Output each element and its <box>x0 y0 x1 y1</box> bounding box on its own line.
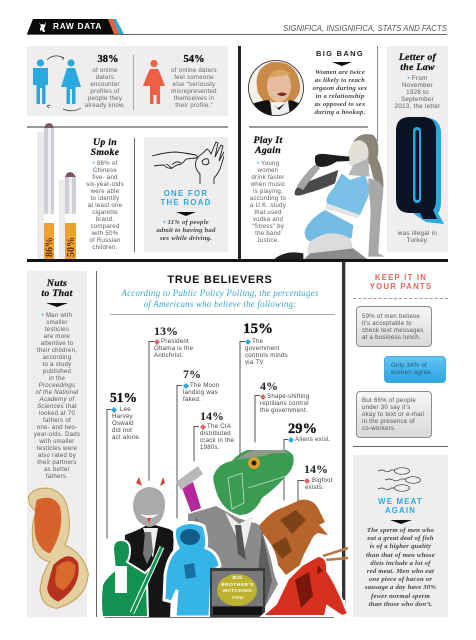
bubble 2 <box>384 356 446 383</box>
stat 38%: already know. <box>85 102 125 109</box>
image: peanut <box>28 488 89 609</box>
heading <box>398 52 437 73</box>
heading: WE MEAT <box>378 497 423 506</box>
text: orgasm during sex <box>313 85 367 92</box>
bubble 1: 59% of men believe <box>362 313 420 320</box>
stat 38%: of online <box>92 67 118 74</box>
text: as opposed to sex <box>315 101 365 108</box>
text: 1928 to <box>406 89 429 96</box>
stat: 4%: reptilians control <box>260 400 309 407</box>
text: up in smoke: children. <box>92 244 118 251</box>
icon: hands <box>152 141 224 184</box>
panel: online daters <box>27 46 228 116</box>
big letter Q <box>396 117 444 224</box>
stat: 14% bigfoot <box>304 462 333 491</box>
text: one- and two- <box>37 424 77 431</box>
tv caption: BROTHER'S <box>221 582 254 588</box>
text: up in smoke: brand, <box>96 216 114 223</box>
text: up in smoke: of Russian <box>89 237 121 244</box>
text <box>156 219 216 242</box>
heading: ONE FOR <box>164 189 208 198</box>
text: up in smoke: to identify <box>91 195 119 202</box>
text <box>394 75 440 110</box>
stat 54%: misrepresented <box>171 88 217 95</box>
heading <box>378 497 423 515</box>
stat: 14% CIA: crack in the <box>200 437 234 444</box>
bigfoot <box>323 548 348 560</box>
heading: play it again: Again <box>255 145 281 156</box>
heading: AGAIN <box>385 506 416 515</box>
stat: 51% <box>110 390 141 441</box>
stat 38%: people they <box>88 95 122 102</box>
bubble 3: under 30 say it’s <box>362 404 411 411</box>
stat: 7%: faked. <box>183 396 201 403</box>
text: up in smoke: Chinese <box>93 167 117 174</box>
bubble 3: But 66% of people <box>362 397 416 404</box>
icon: sperm <box>378 467 421 492</box>
photo: woman drinking <box>275 134 385 259</box>
heading: BIG BANG <box>316 49 364 58</box>
text: play it again: when music <box>251 181 285 188</box>
stat 54%: 54% <box>184 54 204 65</box>
tv caption <box>221 576 254 600</box>
bubble 1 <box>356 306 432 347</box>
text: published <box>43 368 71 375</box>
text: year-olds. Dads <box>34 431 80 438</box>
text: • From <box>407 75 428 82</box>
text: eat a great deal of fish <box>367 535 434 542</box>
stat 54% <box>171 54 217 109</box>
stat: 15%: 15% <box>243 321 273 337</box>
text: was illegal in <box>398 230 437 237</box>
bubble 3: in the presence of <box>362 418 415 425</box>
subheading <box>120 288 319 309</box>
heading: up in smoke: Smoke <box>91 147 119 158</box>
stat: 15%: controls minds <box>245 352 288 359</box>
text <box>312 69 367 116</box>
text: play it again: is playing, <box>253 188 283 195</box>
text: play it again <box>250 160 286 244</box>
panel: up in smoke cigarettes <box>37 123 77 259</box>
bubble 1: it’s acceptable to <box>362 320 412 327</box>
stat: 4%: 4% <box>260 379 278 393</box>
lightsaber <box>182 482 201 512</box>
stat: 15%: via TV. <box>245 359 265 366</box>
stat 38%: 38% <box>98 54 118 65</box>
stat: 51%: Oswald <box>112 420 134 427</box>
obama suit <box>122 525 174 617</box>
heading: Letter of <box>399 52 436 63</box>
stat: 7%: landing was <box>183 389 218 396</box>
icon: man and woman <box>33 56 82 112</box>
text: up in smoke: at least one <box>88 202 122 209</box>
text <box>398 230 437 244</box>
stat: 51%: Lee <box>120 406 131 413</box>
subheading: of Americans who believe the following: <box>144 298 296 308</box>
stat 54%: feel someone <box>174 74 214 81</box>
text: play it again: the band <box>255 230 281 237</box>
text: fathers of <box>43 417 71 424</box>
heading <box>370 273 432 291</box>
triangle <box>390 520 412 524</box>
text: according <box>43 354 71 361</box>
header: tagline: SIGNIFICA, INSIGNIFICA, STATS AND FACTS <box>283 24 447 33</box>
text: Proceedings <box>39 382 75 389</box>
stat: 14% CIA <box>200 409 234 451</box>
icon: overweight figure <box>143 60 165 104</box>
text: than those who don’t. <box>369 601 432 608</box>
text: as better <box>44 466 70 473</box>
text: in the <box>49 375 65 382</box>
text: sex while driving. <box>160 235 212 242</box>
rule <box>353 446 448 447</box>
heading: KEEP IT IN <box>375 273 427 282</box>
astronaut <box>164 522 220 617</box>
text: up in smoke: compared <box>90 223 120 230</box>
text: fathers. <box>46 473 68 480</box>
stat: 7% <box>183 367 219 403</box>
text: attentive to <box>41 340 73 347</box>
heading: play it again: Play It <box>253 135 283 146</box>
stat 38%: daters <box>96 74 114 81</box>
stat: 14% CIA: 1980s. <box>200 444 220 451</box>
stat: 13%: President <box>161 338 189 345</box>
text: up in smoke: cigarette <box>92 209 118 216</box>
text: looked at 70 <box>39 410 75 417</box>
stat: 14% bigfoot: exists. <box>305 484 324 491</box>
stat: 15% <box>243 321 288 366</box>
panel: keep it in your pants <box>353 273 448 447</box>
text: play it again: “Stress” by <box>252 223 284 230</box>
photo: woman portrait <box>248 60 304 116</box>
stat 54%: themselves in <box>174 95 214 102</box>
bubble 2: women agree. <box>391 369 433 376</box>
text: 2013, the letter <box>394 103 440 110</box>
stat 54%: of online daters <box>171 67 217 74</box>
tv caption: YOU <box>232 596 243 600</box>
collage baseline <box>105 617 334 618</box>
stat: 4%: the government. <box>260 407 308 414</box>
text: • 11% of people <box>163 219 209 226</box>
panel: letter of the law <box>387 46 448 252</box>
heading: THE ROAD <box>160 198 212 207</box>
heading: up in smoke: Up in <box>93 137 117 148</box>
text <box>34 312 80 480</box>
heading: TRUE BELIEVERS <box>167 274 273 286</box>
text: testicles <box>45 326 69 333</box>
text: Academy of <box>40 396 74 403</box>
stat: 51%: act alone. <box>112 434 141 441</box>
stat: 15%: The <box>252 338 263 345</box>
bubble 3 <box>356 391 432 438</box>
text: admit to having had <box>156 227 215 234</box>
TV <box>210 568 265 617</box>
text: than that of men whose <box>366 552 435 559</box>
stat: 13% <box>154 324 193 359</box>
suit <box>188 506 278 616</box>
text: Sciences that <box>37 403 77 410</box>
heading: to That <box>41 288 73 299</box>
stat: 14% bigfoot: Bigfoot <box>312 477 333 484</box>
stat: 29%: Aliens exist. <box>295 436 331 443</box>
stat: 51%: Harvey <box>112 413 133 420</box>
stat: 14% CIA: The CIA <box>207 423 231 430</box>
triangle <box>176 212 196 216</box>
heading <box>160 189 212 207</box>
stat 38% <box>85 54 125 109</box>
bubble 1: check text messages <box>362 327 424 334</box>
panel: big bang <box>248 49 367 116</box>
text: fewer normal sperm <box>371 593 430 600</box>
text: up in smoke: were able <box>91 188 119 195</box>
text: diets include a lot of <box>370 560 431 567</box>
text: play it again: • Young <box>257 160 279 167</box>
text: their children, <box>37 347 77 354</box>
header: rule <box>27 34 447 35</box>
text: September <box>401 96 434 103</box>
header: raw data tab: RAW DATA <box>53 21 102 31</box>
text <box>364 527 436 608</box>
stat: 51%: 51% <box>110 390 137 405</box>
stat: 29% <box>288 421 331 443</box>
stat 38%: encounter <box>90 81 120 88</box>
column rule right <box>342 262 345 600</box>
text: play it again: that used <box>254 209 282 216</box>
text: November <box>402 82 433 89</box>
text: their partners <box>37 459 77 466</box>
dashed rule <box>353 298 448 299</box>
stat: 4% <box>260 379 309 414</box>
stat: 4%: Shape-shifting <box>267 393 309 400</box>
text: as likely to reach <box>315 77 365 84</box>
bubble 1: at a business lunch. <box>362 334 421 341</box>
text: play it again: drink faster <box>251 174 285 181</box>
bubble 3: co-workers. <box>362 425 396 432</box>
stat 54%: else “seriously <box>173 81 215 88</box>
triangle <box>46 303 68 307</box>
heading <box>41 278 73 299</box>
text: play it again: vodka and <box>253 216 283 223</box>
text: play it again: a U.K. study <box>250 202 286 209</box>
text: sausage a day have 30% <box>365 584 436 591</box>
heading: play it again <box>253 135 283 156</box>
text: of the National <box>35 389 79 396</box>
text: to a study <box>43 361 71 368</box>
text: up in smoke: five- and <box>92 174 118 181</box>
text: during a hookup. <box>315 109 365 116</box>
text: play it again: according to <box>250 195 286 202</box>
stat 38%: profiles of <box>90 88 120 95</box>
stat: 13%: 13% <box>154 324 178 338</box>
tv caption: WATCHING <box>223 589 252 594</box>
heading: the Law <box>400 62 435 73</box>
text: in a relationship <box>316 93 364 100</box>
alien <box>257 500 328 575</box>
text: up in smoke: with 50% <box>92 230 118 237</box>
heading: up in smoke <box>90 137 119 158</box>
text: play it again: women <box>258 167 278 174</box>
tv caption: BIG <box>232 576 243 581</box>
text: • Men with <box>42 312 72 319</box>
triangle <box>332 62 352 66</box>
header: raw data tab <box>27 19 124 34</box>
lizard <box>213 447 294 515</box>
panel: we meat again <box>353 455 448 617</box>
panel: one for the road <box>144 137 228 252</box>
text: Women are twice <box>315 69 365 76</box>
stat: 14% bigfoot: 14% <box>304 462 328 476</box>
heading: YOUR PANTS <box>370 282 432 291</box>
panel: true believers <box>120 274 319 309</box>
stat: 14% CIA: distributed <box>200 430 231 437</box>
bubble 2: Only 34% of <box>391 362 427 369</box>
stat: 29%: 29% <box>288 421 317 437</box>
text: are more <box>44 333 70 340</box>
text: red meat. Men who eat <box>367 568 434 575</box>
text: up in smoke <box>86 160 124 251</box>
thick section rule <box>27 259 448 262</box>
text: smaller <box>46 319 68 326</box>
text: play it again: Justice. <box>257 237 279 244</box>
heading: Nuts <box>47 278 67 289</box>
text: Turkey. <box>406 237 429 244</box>
text: testicles were <box>37 445 77 452</box>
text: The sperm of men who <box>367 527 434 534</box>
text: with smaller <box>39 438 75 445</box>
bubble 3: okay to text or e-mail <box>362 411 424 418</box>
text: is of a higher quality <box>370 543 431 550</box>
text: one piece of bacon or <box>369 576 432 583</box>
stat: 13%: Antichrist. <box>154 352 184 359</box>
panel: nuts to that <box>27 271 87 617</box>
text: up in smoke: six-year-olds <box>86 181 124 188</box>
text: also rated by <box>38 452 76 459</box>
oswald <box>101 540 150 617</box>
stat: 14% CIA: 14% <box>200 409 224 423</box>
stat: 7%: The Moon <box>190 382 219 389</box>
obama head <box>133 487 165 527</box>
stat: 7%: 7% <box>183 367 201 381</box>
stat 54%: their profile.” <box>175 102 213 109</box>
subheading: According to Public Policy Polling, the percentages <box>121 288 319 298</box>
thick black column rule <box>238 46 240 260</box>
stat: 13%: Obama is the <box>154 345 193 352</box>
panel: up in smoke cigarettes: 50% <box>66 237 77 257</box>
panel: up in smoke cigarettes: 86% <box>44 237 56 257</box>
stat: 15%: government <box>245 345 280 352</box>
text: up in smoke: • 86% of <box>93 160 117 167</box>
collage of conspiracy figures <box>102 450 348 617</box>
stat: 51%: did not <box>112 427 132 434</box>
